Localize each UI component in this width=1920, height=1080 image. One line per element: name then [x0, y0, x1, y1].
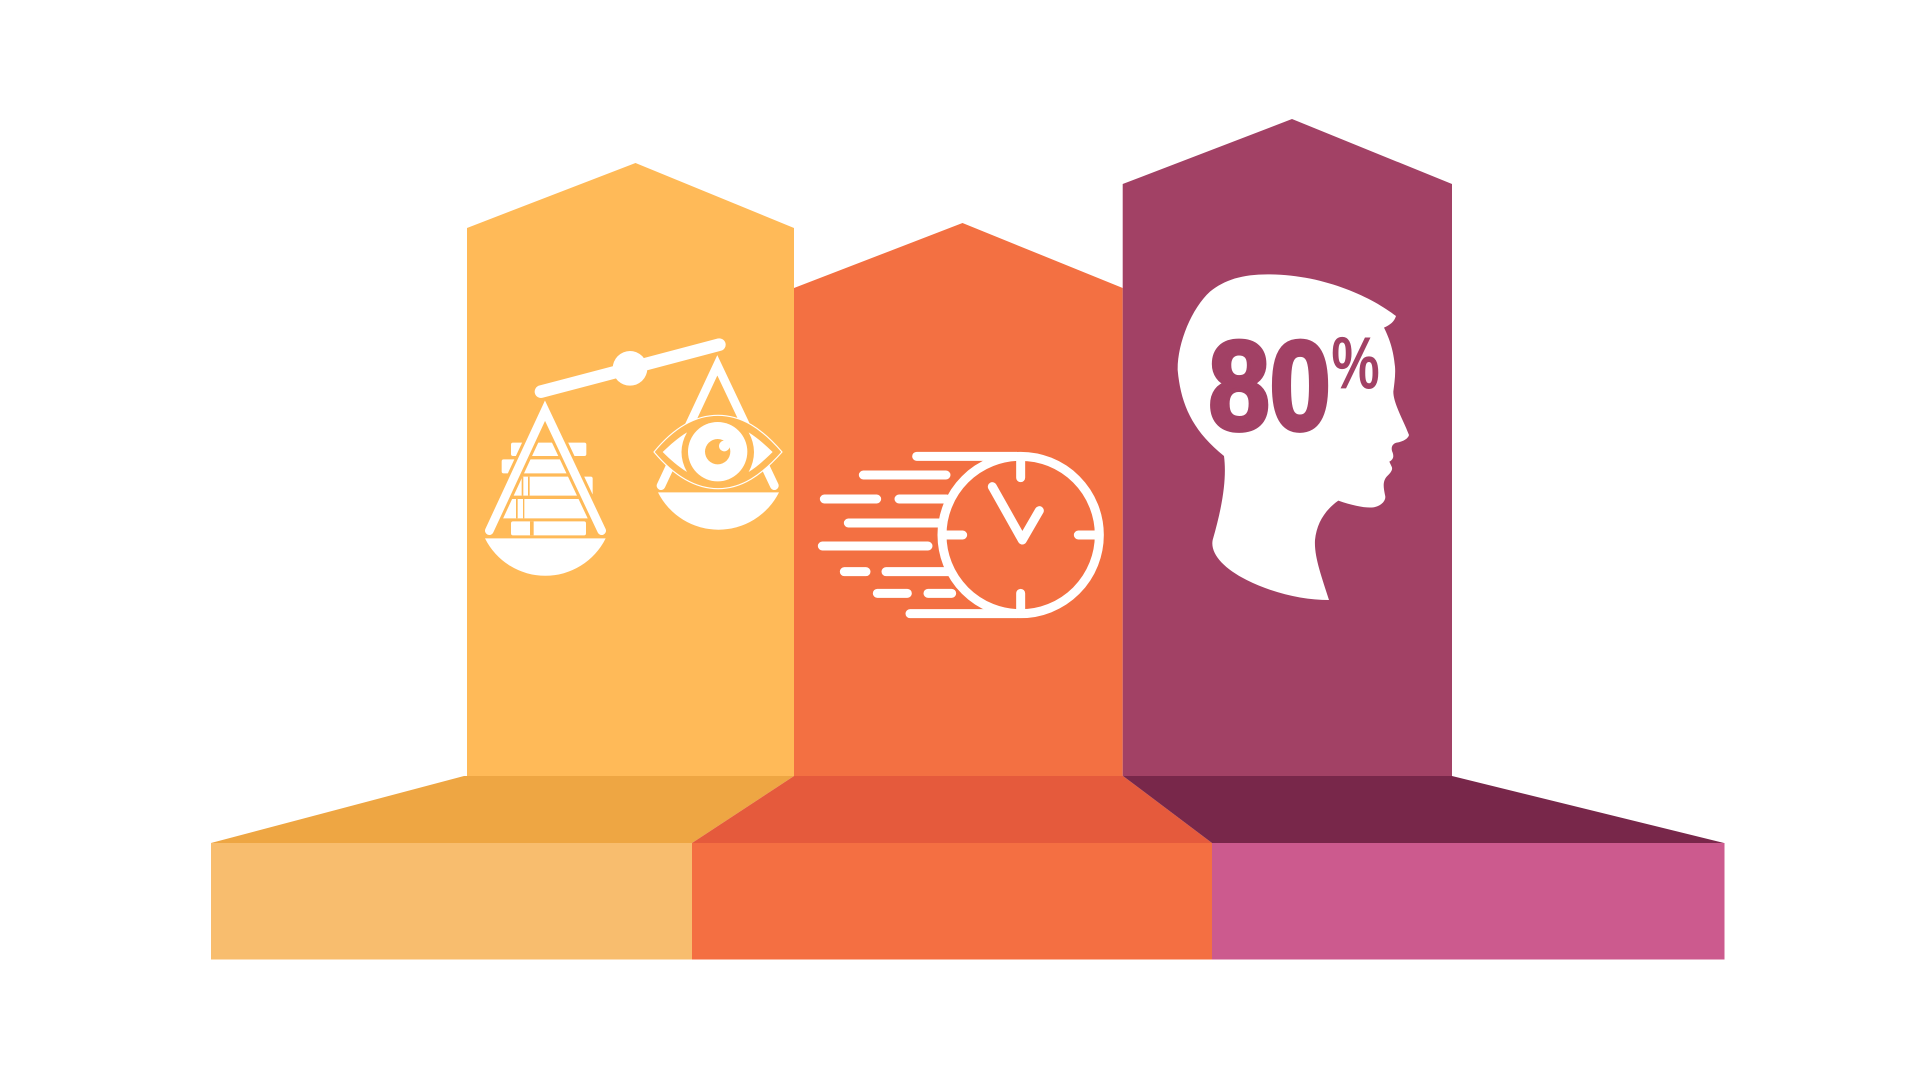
base top: plum slope: [1123, 776, 1724, 843]
icon: fast clock with speed lines: [822, 456, 1099, 614]
right pan holding eye: [654, 365, 782, 530]
panel: yellow pillar: [467, 163, 794, 776]
statistic: percent sign: %: [1331, 322, 1380, 405]
panel: orange pillar: [794, 223, 1123, 776]
base top: yellow slope: [211, 776, 794, 843]
left pan holding books: [485, 411, 606, 576]
clock ticks: [947, 461, 1095, 609]
panel: plum pillar: [1123, 119, 1452, 776]
base front: orange block: [692, 843, 1212, 960]
scale beam and pivot: [541, 345, 719, 392]
clock hands: [992, 487, 1039, 540]
icon: balance scale with books and eye: [485, 345, 782, 576]
base front: pink block: [1212, 843, 1724, 960]
head profile: [1178, 274, 1409, 600]
base top: orange slope: [692, 776, 1212, 843]
statistic: 80: 80: [1209, 315, 1331, 456]
icon: head silhouette with 80 percent: [1178, 274, 1409, 600]
clock face: [942, 456, 1099, 614]
base front: yellow block: [211, 843, 692, 960]
speed lines: [822, 456, 1017, 614]
